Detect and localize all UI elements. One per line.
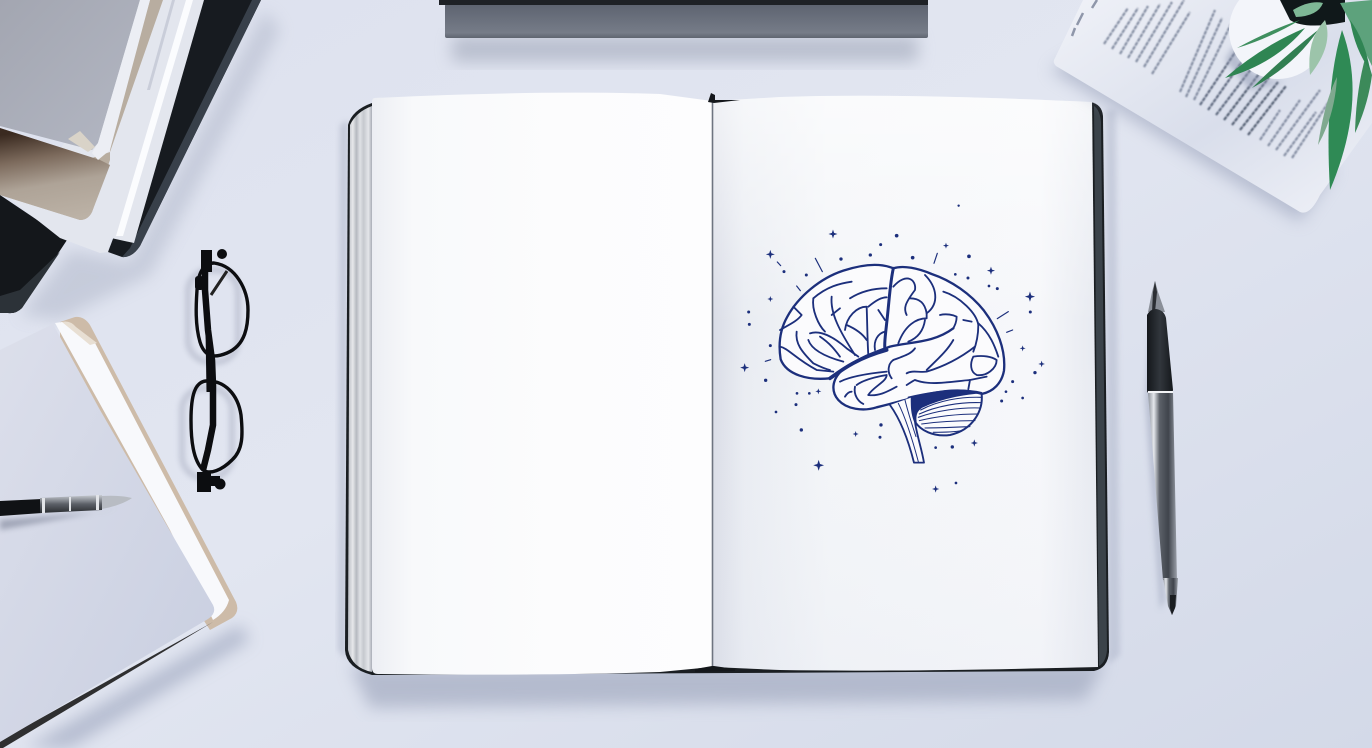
pen, right of notebook (1145, 281, 1178, 615)
notebook, bottom left (0, 317, 250, 748)
brain sketch with sparkles (740, 204, 1045, 493)
open notebook (338, 93, 1120, 708)
book shadow (20, 10, 280, 320)
right page (713, 96, 1098, 671)
glasses shadow (182, 270, 238, 478)
white page edge (55, 322, 229, 620)
plant leaves (1225, 0, 1372, 190)
temples (203, 252, 213, 470)
tan book (0, 0, 163, 220)
fountain pen on notebook (0, 495, 132, 530)
stack of books, top left (0, 0, 280, 320)
left page edge stack (348, 106, 372, 672)
lower black book (0, 195, 67, 313)
ribbon marker (708, 93, 740, 103)
lower lens (191, 381, 242, 472)
dark cover (108, 0, 261, 257)
paper shadow (1050, 40, 1335, 222)
left page (372, 93, 712, 675)
glasses (182, 249, 248, 492)
binding marks (1072, 0, 1097, 36)
notebook shadow (350, 662, 1105, 708)
spark strokes (765, 253, 1013, 361)
notebook shadow (25, 625, 250, 748)
sparkles (740, 204, 1045, 493)
printed paper, top right (1050, 0, 1372, 222)
cover (0, 324, 214, 742)
text lines (1104, 0, 1330, 158)
grey top book (0, 0, 140, 150)
sheet (1054, 0, 1372, 213)
upper lens (196, 263, 248, 356)
plant pot (1225, 45, 1285, 90)
tan edge (60, 317, 237, 630)
black cover (345, 102, 1109, 675)
top centre book (439, 0, 928, 62)
bottom spine shadow (695, 666, 735, 672)
white page block (8, 0, 204, 253)
dark lower edge (0, 622, 213, 748)
cerebellum (908, 390, 982, 435)
spine line (712, 100, 714, 668)
brain stem (890, 397, 924, 463)
cerebrum (780, 265, 1004, 409)
